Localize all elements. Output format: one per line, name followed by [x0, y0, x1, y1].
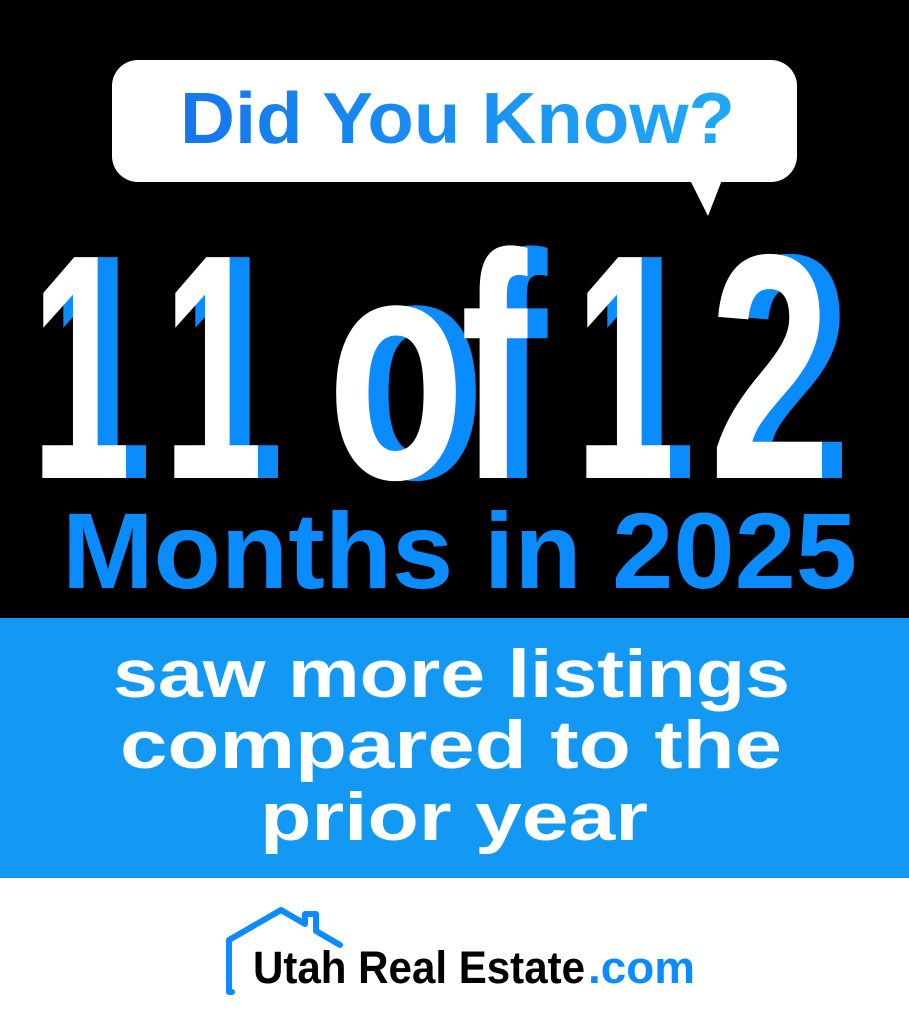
bubble text: Did You Know? — [180, 79, 735, 159]
headline: 11 of 12: 1 — [163, 189, 263, 547]
subheading: Months in 2025: Months in 2025 — [62, 490, 857, 611]
logo: .com — [588, 942, 695, 993]
headline: 11 of 12: f — [481, 187, 549, 547]
headline: 11 of 12: 1 — [31, 189, 131, 547]
headline: 11 of 12 — [31, 187, 851, 547]
blue band — [0, 618, 909, 878]
band text: prior year — [260, 779, 648, 855]
headline: 11 of 12: o — [327, 187, 465, 546]
logo text: Utah Real Estate — [253, 942, 585, 993]
headline: 11 of 12: 2 — [729, 189, 851, 547]
headline: 11 of 12: 2 — [709, 189, 831, 547]
headline: 11 of 12: 1 — [183, 189, 283, 547]
headline: 11 of 12: o — [347, 187, 485, 546]
headline: 11 of 12: 1 — [595, 189, 695, 547]
speech bubble — [112, 60, 797, 216]
band text: compared to the — [120, 707, 782, 783]
logo — [229, 910, 695, 993]
headline: 11 of 12: 1 — [51, 189, 151, 547]
band text: saw more listings — [113, 636, 790, 712]
band text — [113, 636, 790, 855]
headline: 11 of 12: f — [461, 187, 529, 547]
icon: house outline — [229, 910, 340, 992]
headline: 11 of 12: 1 — [575, 189, 675, 547]
